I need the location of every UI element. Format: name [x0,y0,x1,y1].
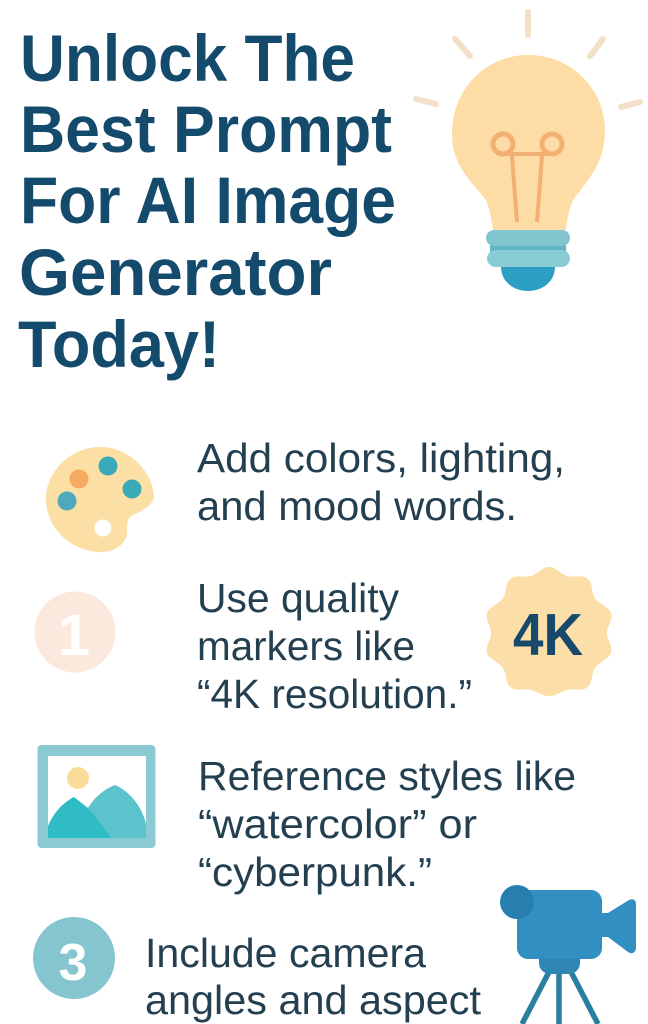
icon: number 1 badge [34,592,116,672]
text: styles tip: Reference styles like [198,753,576,799]
text: colors tip: and mood words. [197,483,517,529]
title: Generator [19,235,332,309]
text: quality tip [197,575,472,717]
icon: video camera [500,885,636,1024]
title: Today! [18,307,220,381]
icon: number 1 badge: 1 [58,603,90,668]
title: Unlock The [20,21,355,95]
text: camera tip: angles and aspect [145,977,482,1023]
icon: 4K badge [487,567,611,696]
text: quality tip: markers like [197,623,415,669]
title: For AI Image [20,163,396,237]
title: Best Prompt [20,92,392,166]
icon: light bulb [416,12,640,291]
text: styles tip: “cyberpunk.” [198,849,432,895]
text: colors tip [197,435,565,529]
icon: 4K badge: 4K [513,602,583,668]
icon: palette [46,447,154,552]
icon: number 3 badge: 3 [59,934,87,992]
icon: picture frame [38,745,156,848]
icon: number 3 badge [33,917,115,999]
text: quality tip: “4K resolution.” [197,671,472,717]
text: styles tip [198,753,576,895]
text: styles tip: “watercolor” or [198,801,477,847]
text: camera tip [145,930,482,1023]
text: colors tip: Add colors, lighting, [197,435,565,481]
text: camera tip: Include camera [145,930,426,976]
title [18,21,396,381]
text: quality tip: Use quality [197,575,399,621]
